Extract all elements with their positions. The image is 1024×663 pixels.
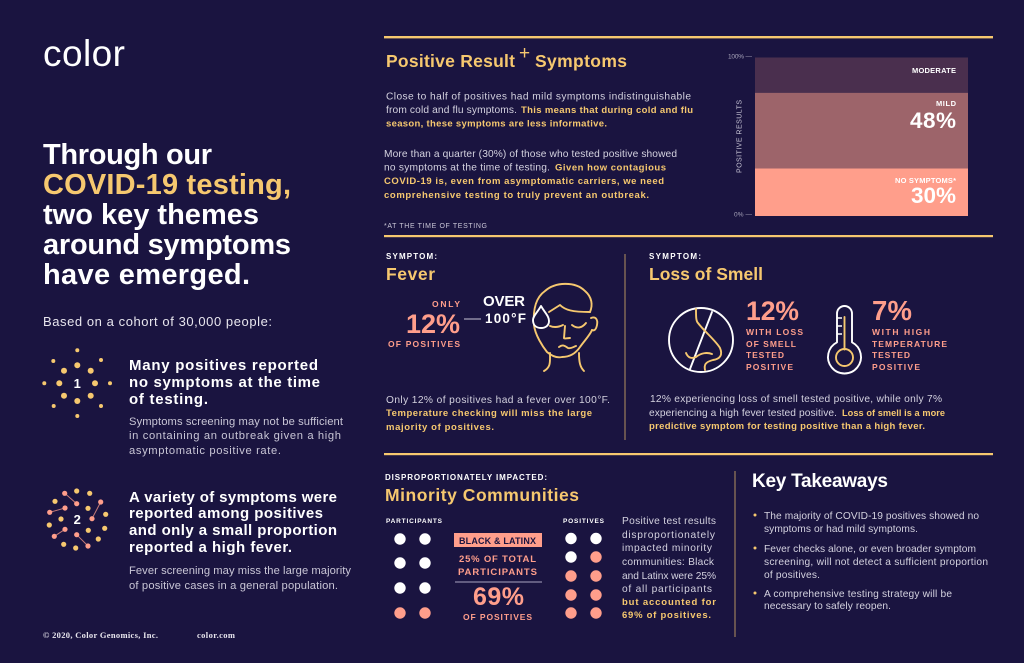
stat: 12% smell: WITH LOSS [746, 327, 803, 337]
segment: no symptoms [755, 168, 968, 216]
theme 1 description: Symptoms screening may not be sufficient [129, 416, 344, 428]
loss of smell heading: SYMPTOM: [649, 252, 701, 261]
heading: Symptoms [535, 51, 627, 71]
icon: connected dots 2 [47, 488, 108, 551]
callout: black and latinx: BLACK & LATINX [459, 536, 536, 546]
panel: positive result and symptoms [384, 36, 993, 230]
cohort note: Based on a cohort of 30,000 people: [43, 314, 272, 329]
stat: 12% of positives: OF POSITIVES [388, 339, 460, 349]
stat: 12% of positives: 12% [406, 309, 460, 339]
icon: radial dots 1: 1 [74, 376, 81, 391]
heading: Positive Result [386, 51, 515, 71]
takeaway 2: Fever checks alone, or even broader symptom [764, 544, 976, 555]
headline: Through our [43, 139, 212, 171]
chart axis labels [728, 54, 752, 218]
icon: crossed nose [669, 308, 733, 372]
theme 2 heading [129, 489, 337, 556]
chart axis labels: 0% — [734, 212, 752, 218]
heading: + [519, 43, 530, 64]
minority text: communities: Black [622, 557, 715, 568]
segment: moderate: MODERATE [912, 66, 956, 75]
headline: two key themes [43, 199, 259, 231]
paragraph: no symptoms: Given how contagious [555, 162, 666, 174]
loss of smell text [649, 394, 945, 432]
theme 1 [42, 348, 344, 457]
paragraph: no symptoms [384, 149, 677, 201]
fever heading: Fever [386, 264, 435, 284]
minority text: and Latinx were 25% [622, 571, 716, 582]
segment: no symptoms: 30% [911, 183, 956, 208]
paragraph: no symptoms: COVID-19 is, even from asymptomatic carriers, we need [384, 176, 664, 187]
icon: radial dots 1 [42, 348, 112, 418]
loss of smell heading: Loss of Smell [649, 264, 763, 284]
footer: © 2020, Color Genomics, Inc. [43, 630, 158, 640]
headline: COVID-19 testing, [43, 169, 291, 201]
theme 1 heading [129, 357, 320, 408]
theme 2 heading: reported among positives [129, 505, 323, 522]
takeaway 1: symptoms or had mild symptoms. [764, 524, 918, 535]
takeaway 3: A comprehensive testing strategy will be [764, 589, 952, 600]
stacked bar chart [728, 54, 968, 218]
minority text: 69% of positives. [622, 610, 711, 621]
dot chart: positives: POSITIVES [563, 518, 605, 525]
minority text: but accounted for [622, 597, 716, 608]
takeaway 2: of positives. [764, 570, 820, 581]
stat: 12% of positives [388, 299, 460, 349]
paragraph: mild symptoms: season, these symptoms are less informative. [386, 118, 607, 130]
stat: 7% temperature: TESTED [872, 350, 910, 360]
minority text: impacted minority [622, 543, 713, 554]
headline [43, 139, 291, 291]
paragraph: mild symptoms: Close to half of positives had mild symptoms indistinguishable [386, 92, 691, 102]
icon: connected dots 2: 2 [74, 512, 81, 527]
theme 2 heading: reported a high fever. [129, 539, 292, 556]
fever text: Temperature checking will miss the large [386, 408, 592, 419]
takeaway 1: The majority of COVID-19 positives showed no [764, 511, 979, 522]
callout: black and latinx: 25% OF TOTAL [459, 554, 536, 565]
fever text: Only 12% of positives had a fever over 100°F. [386, 395, 610, 406]
stat: 7% temperature: WITH HIGH [872, 327, 930, 337]
callout: black and latinx: OF POSITIVES [463, 612, 532, 622]
footer: color.com [197, 630, 235, 640]
takeaway 3: necessary to safely reopen. [764, 601, 891, 612]
theme 2 description: of positive cases in a general population. [129, 580, 338, 592]
panel: key takeaways [752, 471, 988, 612]
fever heading [386, 252, 437, 284]
dot chart: participants [386, 518, 443, 619]
theme 2 description: Fever screening may miss the large majority [129, 565, 351, 577]
segment: mild [755, 93, 968, 168]
theme 1 description: asymptomatic positive rate. [129, 445, 281, 457]
stat: 12% smell: TESTED [746, 350, 784, 360]
headline: around symptoms [43, 229, 291, 261]
takeaway 2: screening, will not detect a sufficient proportion [764, 557, 988, 568]
theme 1 heading: of testing. [129, 391, 208, 408]
logo: color [43, 33, 125, 74]
dot chart: positives [563, 518, 605, 619]
divider [734, 471, 736, 637]
takeaway 2 [754, 544, 988, 581]
paragraph: mild symptoms: from cold and flu symptoms. [386, 105, 517, 116]
minority heading [385, 473, 579, 505]
theme 1 description [129, 416, 344, 457]
loss of smell text: Loss of smell is a more [842, 408, 945, 418]
takeaway 1 [754, 511, 979, 535]
stat: 12% smell: 12% [746, 296, 799, 326]
theme 1 heading: no symptoms at the time [129, 374, 320, 391]
divider [624, 254, 626, 440]
loss of smell heading [649, 252, 763, 284]
takeaway 3 [754, 589, 952, 612]
stat: 7% temperature [872, 295, 947, 372]
loss of smell text: 12% experiencing loss of smell tested positive, while only 7% [650, 394, 942, 405]
fever heading: SYMPTOM: [386, 252, 437, 261]
paragraph: mild symptoms: This means that during cold and flu [521, 105, 693, 116]
icon: face with sweat drop [533, 284, 597, 371]
panel: minority communities [384, 453, 993, 622]
loss of smell text: predictive symptom for testing positive than a high fever. [649, 421, 925, 432]
stat: over 100°F: OVER [483, 293, 525, 310]
fever text: majority of positives. [386, 422, 494, 433]
loss of smell text: experiencing a high fever tested positive. [649, 408, 837, 419]
paragraph: no symptoms: More than a quarter (30%) of those who tested positive showed [384, 149, 677, 160]
segment: no symptoms: NO SYMPTOMS* [895, 176, 956, 185]
heading [386, 43, 627, 71]
panel: loss of smell [649, 252, 947, 432]
stat: 7% temperature: TEMPERATURE [872, 339, 947, 349]
paragraph: no symptoms: no symptoms at the time of testing. [384, 162, 550, 174]
headline: have emerged. [43, 259, 250, 291]
segment: moderate [755, 58, 968, 93]
theme 2 heading: and only a small proportion [129, 522, 337, 539]
stat: 12% of positives: ONLY [432, 299, 460, 309]
stat: 12% smell: OF SMELL [746, 339, 796, 349]
minority text: of all participants [622, 584, 712, 595]
stat: over 100°F: 100°F [485, 311, 526, 326]
theme 2 heading: A variety of symptoms were [129, 489, 337, 506]
stat: 12% smell [746, 296, 803, 372]
callout: black and latinx [454, 533, 542, 622]
theme 1 description: in containing an outbreak given a high [129, 430, 341, 442]
dot chart: participants: PARTICIPANTS [386, 518, 443, 525]
minority text [622, 516, 716, 621]
stat: 7% temperature: POSITIVE [872, 362, 920, 372]
minority heading: DISPROPORTIONATELY IMPACTED: [385, 473, 547, 482]
theme 2 [47, 488, 351, 592]
stat: 7% temperature: 7% [872, 295, 912, 326]
segment: mild: 48% [910, 108, 956, 133]
paragraph: mild symptoms [386, 92, 693, 130]
chart axis labels: 100% — [728, 54, 752, 60]
fever text [386, 395, 610, 433]
chart axis labels: POSITIVE RESULTS [736, 100, 744, 173]
stat: over 100°F [483, 293, 526, 326]
footer [43, 630, 235, 640]
paragraph: no symptoms: comprehensive testing to truly prevent an outbreak. [384, 190, 649, 201]
minority heading: Minority Communities [385, 485, 579, 505]
callout: black and latinx: PARTICIPANTS [458, 567, 537, 578]
theme 1 heading: Many positives reported [129, 357, 318, 374]
connector line [464, 318, 481, 320]
footnote: *AT THE TIME OF TESTING [384, 223, 487, 230]
minority text: disproportionately [622, 530, 716, 541]
key takeaways heading: Key Takeaways [752, 471, 888, 492]
minority text: Positive test results [622, 516, 716, 527]
stat: 12% smell: POSITIVE [746, 362, 793, 372]
theme 2 description [129, 565, 351, 592]
icon: thermometer [828, 306, 861, 373]
panel: fever [384, 235, 993, 433]
callout: black and latinx: 69% [473, 583, 524, 611]
segment: mild: MILD [936, 99, 957, 108]
